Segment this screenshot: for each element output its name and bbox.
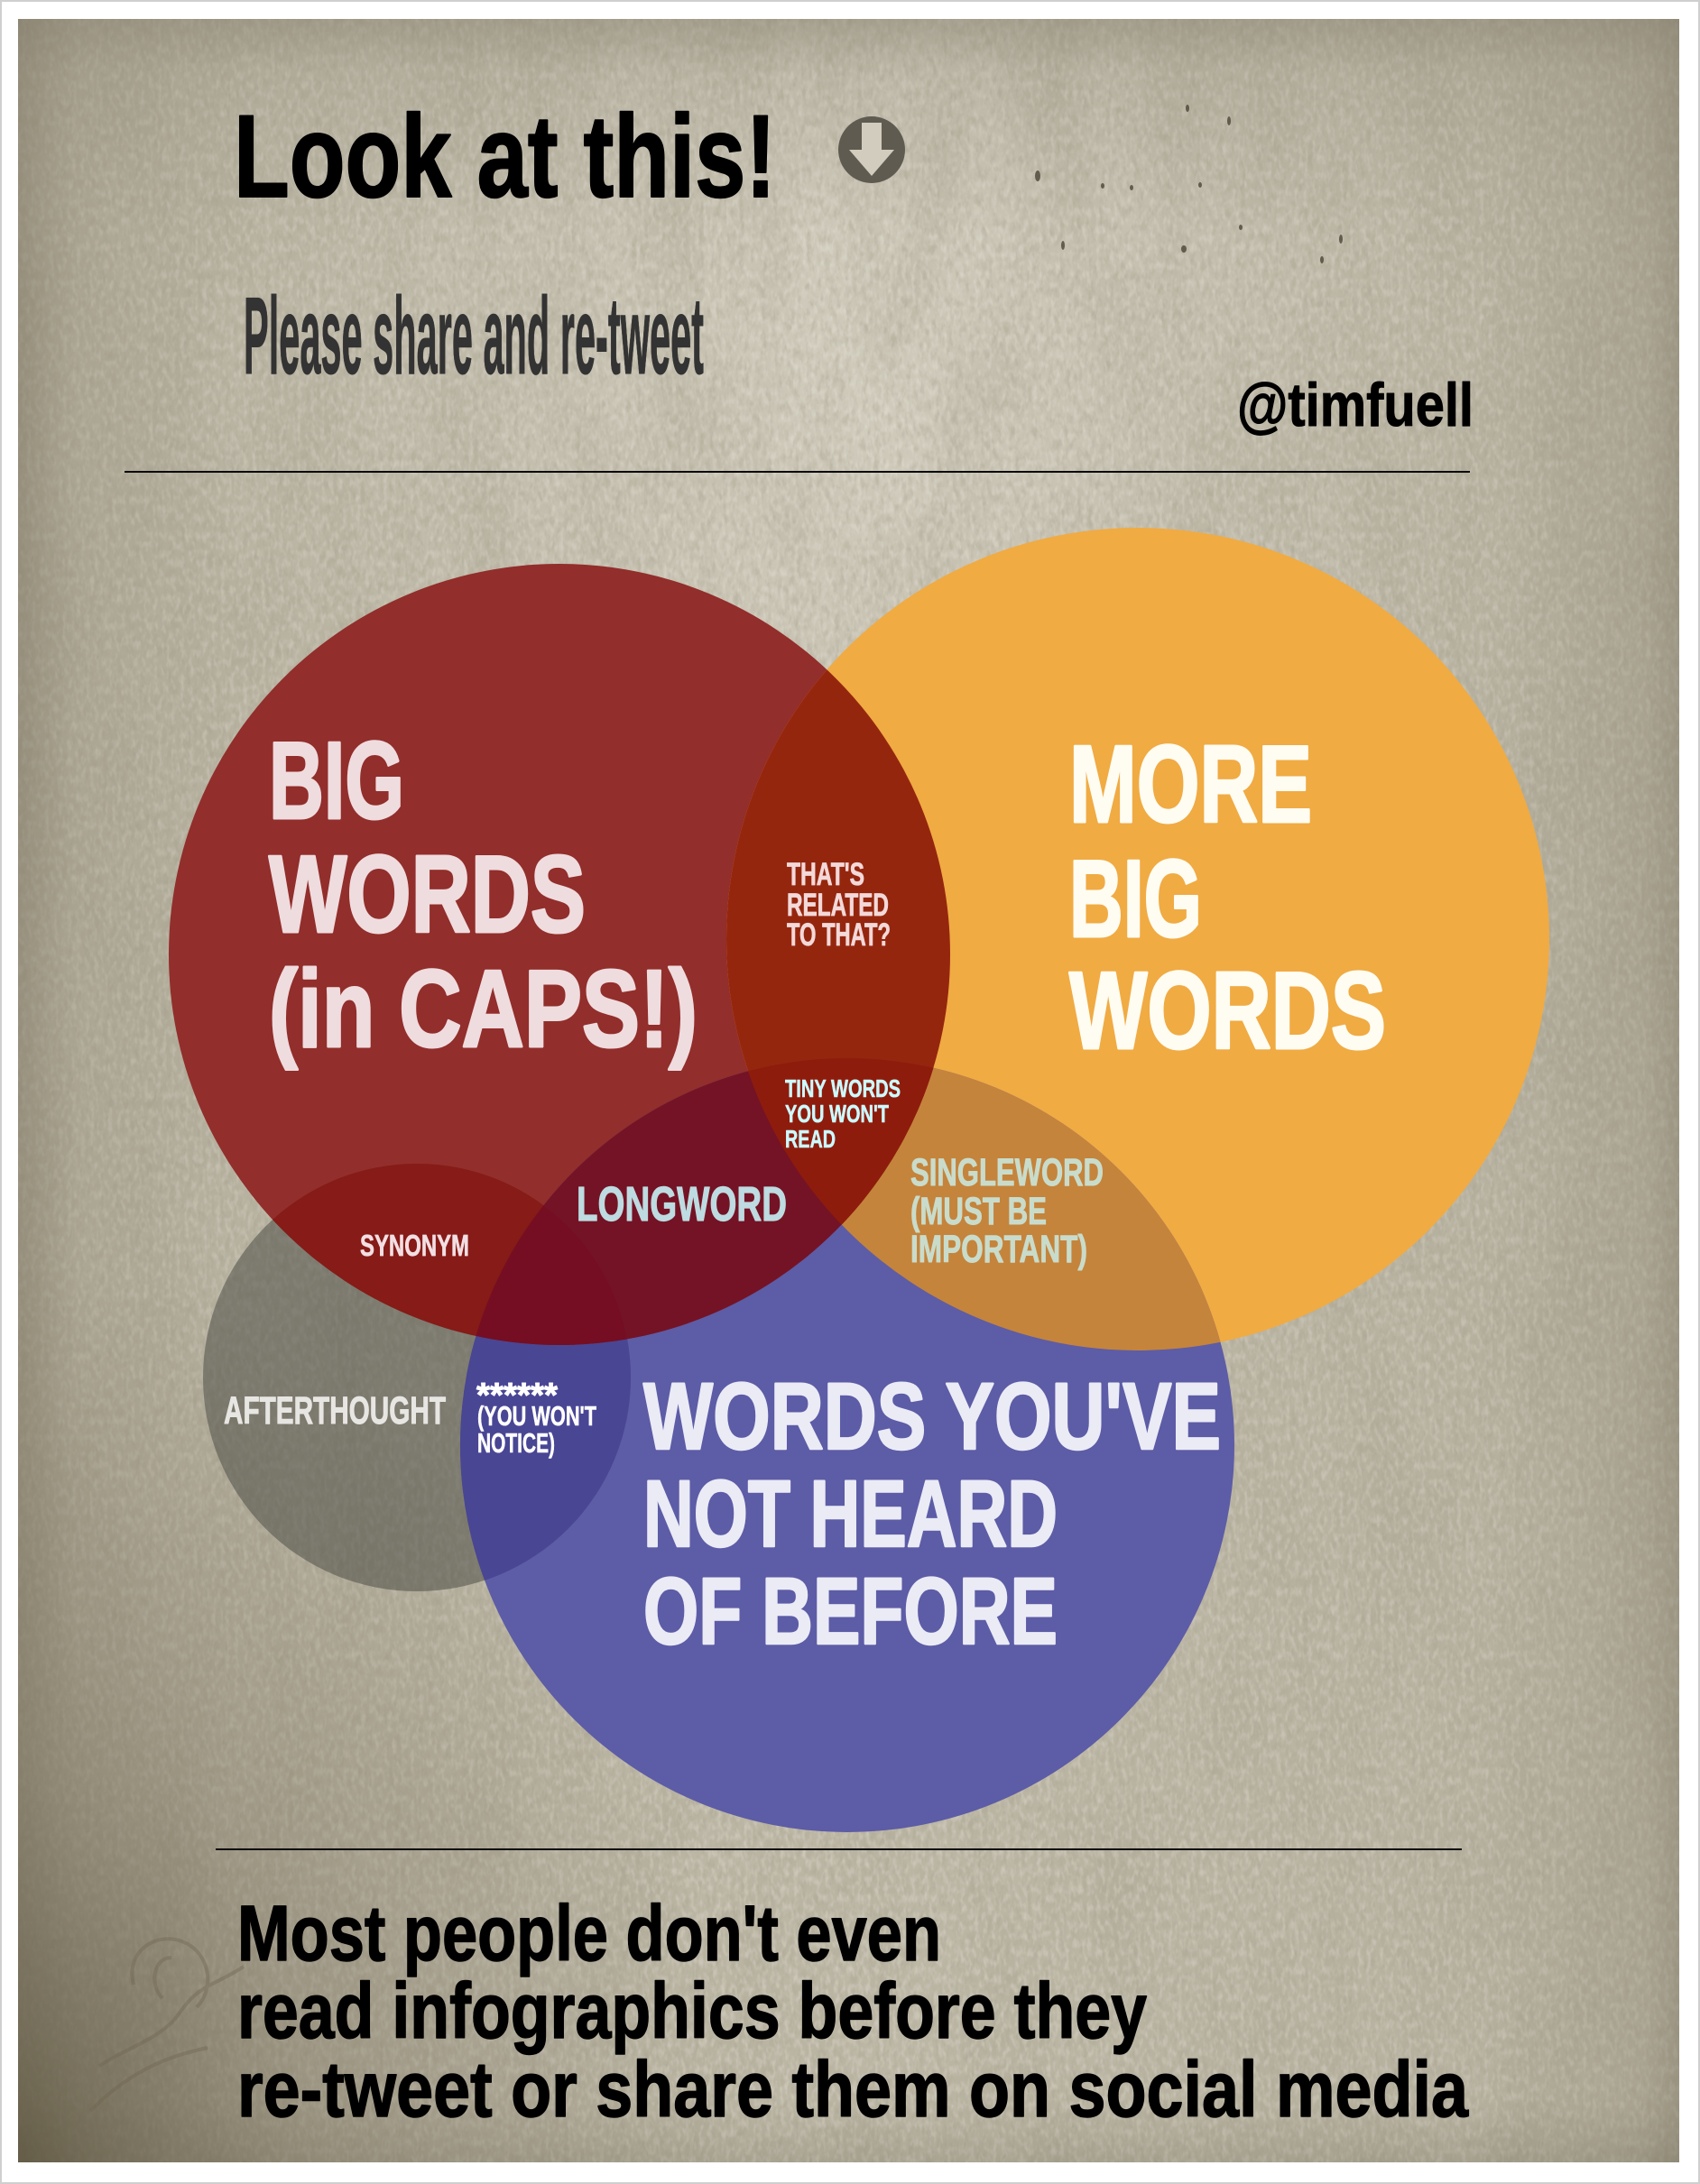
label: afterthought: AFTERTHOUGHT — [224, 1389, 446, 1433]
circle: blue — [460, 1058, 1234, 1832]
label: you won't notice: NOTICE) — [477, 1427, 555, 1459]
label: tiny words: TINY WORDS — [785, 1074, 901, 1102]
label: you won't notice: ****** — [476, 1377, 558, 1415]
text: Please share and re-tweet — [244, 274, 704, 397]
footer text: re-tweet or share them on social media — [237, 2046, 1469, 2133]
label: you won't notice — [476, 1377, 596, 1459]
bottom divider — [216, 1848, 1462, 1850]
label: big words — [269, 719, 698, 1070]
label: that's related: THAT'S — [787, 857, 864, 892]
label: words you've not heard of before: OF BEFORE — [643, 1559, 1058, 1664]
label: longword: LONGWORD — [577, 1177, 787, 1231]
label: words you've not heard of before: NOT HEARD — [643, 1461, 1058, 1567]
label: singleword: (MUST BE — [910, 1190, 1047, 1233]
footer text: read infographics before they — [237, 1967, 1147, 2055]
venn diagram — [169, 528, 1549, 1832]
label: tiny words: YOU WON'T — [785, 1100, 889, 1128]
author handle: @timfuell — [1237, 371, 1474, 439]
overlap: grey and blue — [460, 1205, 631, 1580]
circle: red — [169, 564, 950, 1345]
label: tiny words: READ — [785, 1125, 836, 1153]
overlap: grey and red — [273, 1164, 627, 1345]
top divider — [125, 471, 1470, 473]
label: you won't notice: (YOU WON'T — [477, 1400, 596, 1432]
label: singleword: IMPORTANT) — [910, 1228, 1087, 1271]
label: synonym: SYNONYM — [360, 1229, 469, 1262]
overlap: red and orange — [726, 669, 950, 1221]
heading: Look at this!: Look at this! — [234, 90, 776, 222]
circle: orange — [726, 528, 1549, 1350]
icon: down arrow in circle — [838, 116, 905, 183]
overlap: grey, red and blue — [476, 1205, 627, 1345]
footer text: Most people don't even — [237, 1890, 941, 1977]
overlap: orange and blue — [841, 1068, 1220, 1350]
label: words you've not heard of before: WORDS YOU'VE — [643, 1364, 1221, 1470]
label: more big words: MORE — [1069, 723, 1312, 845]
label: tiny words — [785, 1074, 901, 1153]
label: singleword: SINGLEWORD — [910, 1151, 1104, 1194]
circle: grey — [203, 1164, 631, 1591]
overlap: red and blue — [543, 1068, 933, 1339]
overlap: red, orange and blue — [749, 1058, 933, 1225]
label: big words: (in CAPS!) — [269, 947, 698, 1070]
label: big words: BIG — [269, 719, 404, 842]
footer text — [237, 1890, 1469, 2133]
label: more big words — [1069, 723, 1386, 1072]
label: more big words: WORDS — [1069, 949, 1386, 1072]
label: more big words: BIG — [1069, 837, 1202, 960]
label: big words: WORDS — [269, 833, 586, 955]
label: words you've not heard of before — [643, 1364, 1221, 1664]
label: singleword — [910, 1151, 1104, 1271]
label: that's related: TO THAT? — [787, 917, 891, 953]
label: that's related: RELATED — [787, 888, 889, 923]
label: that's related — [787, 857, 891, 953]
